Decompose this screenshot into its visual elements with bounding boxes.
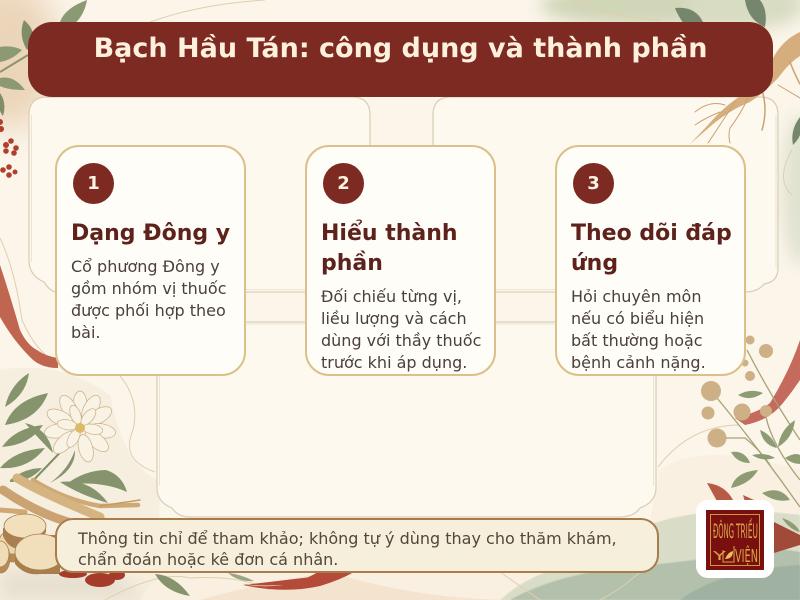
card 3 body: Hỏi chuyên môn nếu có biểu hiện bất thường hoặc bệnh cảnh nặng. <box>571 287 706 372</box>
number badge 3 <box>573 163 614 204</box>
card 3 heading: Theo dõi đáp ứng <box>571 221 732 276</box>
logo <box>696 500 774 578</box>
red berries <box>0 119 19 178</box>
number badge 2: 2 <box>337 173 350 194</box>
disclaimer text: Thông tin chỉ để tham khảo; không tự ý dùng thay cho thăm khám, chẩn đoán hoặc kê đơn cá nhân. <box>78 529 617 569</box>
top right leaves <box>675 0 800 145</box>
red seeds <box>59 570 125 587</box>
bottom left herb bundle <box>0 373 254 596</box>
roots <box>0 478 140 522</box>
root slices <box>0 514 65 574</box>
card 2 <box>305 145 496 376</box>
logo seal: VIỆN <box>735 544 758 567</box>
bottom right herb sprigs <box>701 336 800 553</box>
number badge 1 <box>73 163 114 204</box>
card 1 body: Cổ phương Đông y gồm nhóm vị thuốc được phối hợp theo bài. <box>71 257 226 342</box>
disclaimer note <box>55 518 659 573</box>
title banner <box>28 22 773 97</box>
ornamental frames <box>29 97 778 517</box>
title text: Bạch Hầu Tán: công dụng và thành phần <box>94 33 707 64</box>
card 2 heading: Hiểu thành phần <box>321 221 458 276</box>
card 3 <box>555 145 746 376</box>
card 1 heading: Dạng Đông y <box>71 221 230 246</box>
logo seal: TRIỀU <box>736 516 758 543</box>
number badge 3: 3 <box>587 173 600 194</box>
card 2 body: Đối chiếu từng vị, liều lượng và cách dùng với thầy thuốc trước khi áp dụng. <box>321 287 481 372</box>
logo seal: Y <box>711 549 727 563</box>
flower <box>43 391 117 464</box>
logo seal: ĐÔNG <box>713 519 734 543</box>
top left leaves <box>0 0 87 116</box>
red ribbons <box>0 265 58 368</box>
number badge 1: 1 <box>87 173 100 194</box>
logo seal <box>706 510 764 570</box>
card 1 <box>55 145 246 376</box>
ginseng root top right <box>690 32 800 144</box>
number badge 2 <box>323 163 364 204</box>
